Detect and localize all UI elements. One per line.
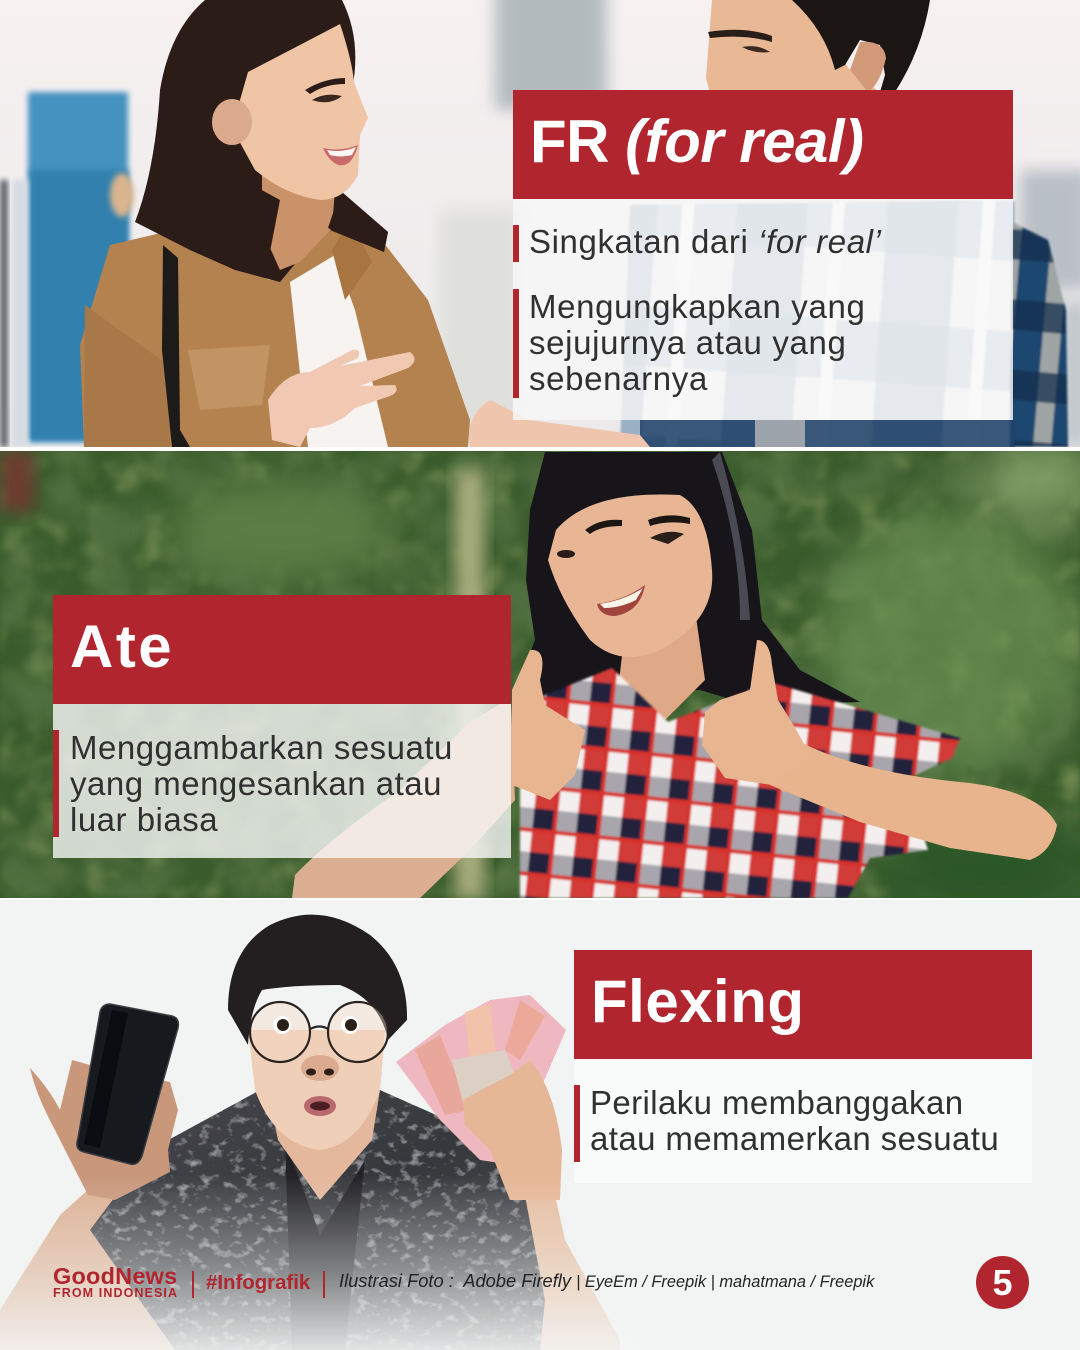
definition sheet: [574, 1059, 1032, 1183]
photo credits: Ilustrasi Foto : Adobe Firefly | EyeEm / Freepik | mahatmana / Freepik: [339, 1270, 874, 1291]
accent bar and text: meaning: atau memamerkan sesuatu: [590, 1120, 999, 1157]
icon: banknotes in hand: [396, 995, 566, 1200]
accent bar and text: meaning: Perilaku membanggakan: [590, 1084, 963, 1121]
accent bar and text: meaning: sejujurnya atau yang: [529, 324, 847, 361]
woman: [80, 0, 470, 447]
heading: Flexing: [574, 950, 1032, 1059]
heading: Ate: [53, 595, 511, 704]
man: [469, 0, 1068, 447]
photo: woman and man talking in the city: [0, 0, 1080, 447]
definition sheet: [53, 704, 511, 858]
footer tag: #Infografik: #Infografik: [206, 1272, 310, 1294]
footer logo: GoodNews from Indonesia: FROM INDONESIA: [53, 1286, 178, 1300]
heading: Flexing: Flexing: [591, 968, 805, 1035]
panel: Flexing: [574, 950, 1032, 1162]
accent bar and text: abbreviation: Singkatan dari ‘for real’: [529, 223, 882, 260]
icon: hand holding phone: [30, 1004, 178, 1200]
accent bar and text: meaning: luar biasa: [70, 801, 218, 838]
panel: FR (for real): [513, 90, 1013, 420]
accent bar and text: meaning: [513, 288, 865, 398]
footer logo: GoodNews from Indonesia: [53, 1263, 178, 1300]
accent bar and text: meaning: Mengungkapkan yang: [529, 288, 865, 325]
footer divider: [192, 1271, 194, 1298]
footer logo: GoodNews from Indonesia: GoodNews: [53, 1263, 177, 1289]
page number badge: 5: [992, 1262, 1013, 1303]
accent bar and text: meaning: [574, 1084, 999, 1162]
definition sheet: [513, 199, 1013, 420]
girl: [512, 452, 1057, 898]
footer divider: [323, 1271, 325, 1298]
photo: smiling girl with two thumbs up over green foliage: [0, 440, 1080, 920]
heading: Ate: Ate: [70, 613, 174, 680]
accent bar and text: meaning: [53, 729, 453, 838]
man: [0, 915, 620, 1350]
heading: FR (for real): FR (for real): [530, 108, 864, 175]
arm of person behind the panel: [292, 700, 515, 898]
hand: [268, 350, 415, 447]
panel: Ate: [53, 595, 511, 858]
accent bar and text: meaning: yang mengesankan atau: [70, 765, 442, 802]
fade to background at bottom: [0, 1175, 640, 1350]
heading: FR (for real): [513, 90, 1013, 199]
accent bar and text: meaning: sebenarnya: [529, 360, 708, 397]
photo: surprised man with phone and banknotes: [0, 900, 1080, 1350]
accent bar and text: meaning: Menggambarkan sesuatu: [70, 729, 453, 766]
page number badge: [976, 1256, 1029, 1309]
